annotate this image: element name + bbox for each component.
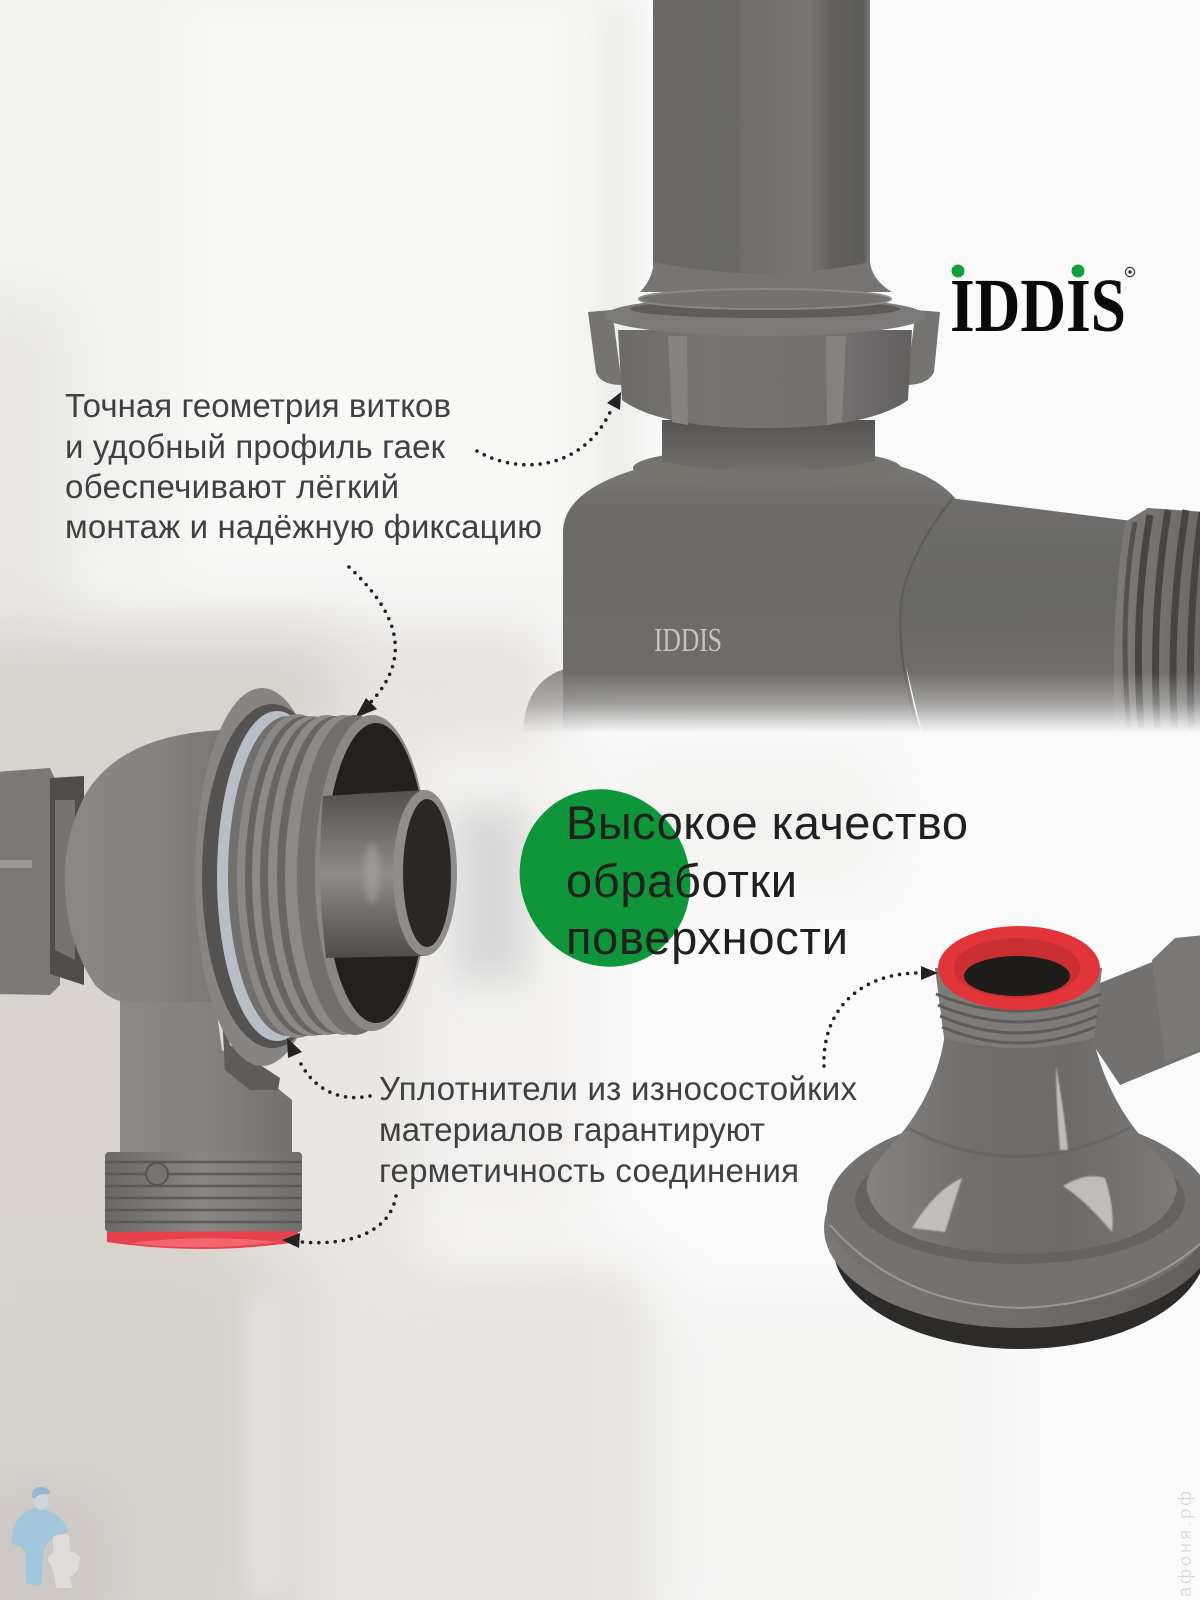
plumber body bbox=[11, 1508, 68, 1586]
opening bbox=[964, 956, 1070, 996]
mouth interior bbox=[325, 723, 427, 1023]
text block: seals: герметичность соединения bbox=[379, 1152, 799, 1189]
product photo: right siphon with red seal bbox=[824, 926, 1200, 1349]
text block: thread geometry: и удобный профиль гаек bbox=[65, 428, 446, 465]
arrow: to red seal bbox=[282, 1196, 396, 1248]
cone shadow line bbox=[908, 1128, 1130, 1156]
outlet thread bbox=[105, 1152, 302, 1232]
heading: поверхности bbox=[566, 911, 848, 964]
product photo: left siphon with threads bbox=[0, 688, 457, 1249]
rubber gasket bbox=[833, 1141, 1200, 1349]
collar bbox=[633, 448, 901, 488]
plumber face bbox=[34, 1492, 48, 1510]
arrow: to nut bbox=[477, 392, 621, 465]
nut top bbox=[612, 302, 920, 334]
ring bbox=[639, 289, 891, 309]
heading: обработки bbox=[566, 854, 797, 907]
logo: IDDIS: IDDIS bbox=[950, 264, 1126, 348]
locking ears bbox=[588, 310, 622, 385]
text block: seals: Уплотнители из износостойких bbox=[379, 1070, 858, 1107]
red seal bottom bbox=[107, 1231, 298, 1249]
heading: Высокое качество bbox=[566, 796, 968, 849]
text block: thread geometry: Точная геометрия витков bbox=[65, 387, 451, 424]
flange bbox=[195, 688, 329, 1066]
side outlet pipe bbox=[880, 470, 1140, 745]
tube end bbox=[393, 790, 457, 956]
cone highlights bbox=[912, 1066, 1113, 1232]
neck thread bbox=[935, 968, 1102, 1048]
registered mark bbox=[1125, 267, 1135, 277]
text block: thread geometry: монтаж и надёжную фиксацию bbox=[65, 508, 542, 545]
product photo: top siphon with pipe and nut bbox=[523, 0, 1200, 745]
text block: seals: материалов гарантируют bbox=[379, 1111, 765, 1148]
nut connector bbox=[50, 776, 84, 985]
main sphere body bbox=[65, 730, 250, 1002]
brand mark on body: IDDIS bbox=[654, 622, 722, 659]
mouth rim bbox=[315, 715, 429, 1031]
watermark: site name: афоня.рф bbox=[1175, 1491, 1195, 1597]
lower outlet bbox=[120, 1000, 292, 1165]
nut ribs bbox=[668, 336, 688, 425]
base flange edge bbox=[524, 670, 563, 730]
arrow: to red ring bbox=[824, 966, 938, 1066]
green accent blob bbox=[489, 759, 721, 997]
arrow: to seal ring bbox=[287, 1038, 370, 1098]
inner tube bbox=[320, 790, 425, 958]
base side bbox=[824, 1128, 1200, 1328]
seal ring bbox=[217, 711, 337, 1041]
pipe flare bbox=[640, 262, 892, 292]
side outlet thread bbox=[1114, 508, 1200, 745]
pipe bbox=[653, 0, 870, 280]
left nut bbox=[0, 768, 60, 995]
neck bbox=[662, 420, 875, 472]
heading bbox=[566, 796, 968, 964]
text block: seals bbox=[379, 1070, 858, 1189]
text block: thread geometry bbox=[65, 387, 542, 545]
dark groove bbox=[202, 704, 342, 1048]
base top bbox=[827, 1113, 1200, 1307]
nut body bbox=[618, 330, 912, 428]
thread rings bbox=[237, 714, 413, 1038]
text block: thread geometry: обеспечивают лёгкий bbox=[65, 468, 399, 505]
toilet bbox=[48, 1534, 80, 1588]
trap body bbox=[563, 462, 955, 745]
red seal ring bbox=[938, 926, 1100, 1010]
cone and dome bbox=[867, 1033, 1177, 1254]
shoulder ring bbox=[855, 1136, 1185, 1264]
plumber cap bbox=[32, 1487, 50, 1499]
arrow: to threaded mouth bbox=[349, 567, 395, 718]
mascot: plumber watermark bbox=[11, 1487, 80, 1588]
side pipe bbox=[1090, 943, 1200, 1085]
logo green dots bbox=[952, 264, 1084, 278]
